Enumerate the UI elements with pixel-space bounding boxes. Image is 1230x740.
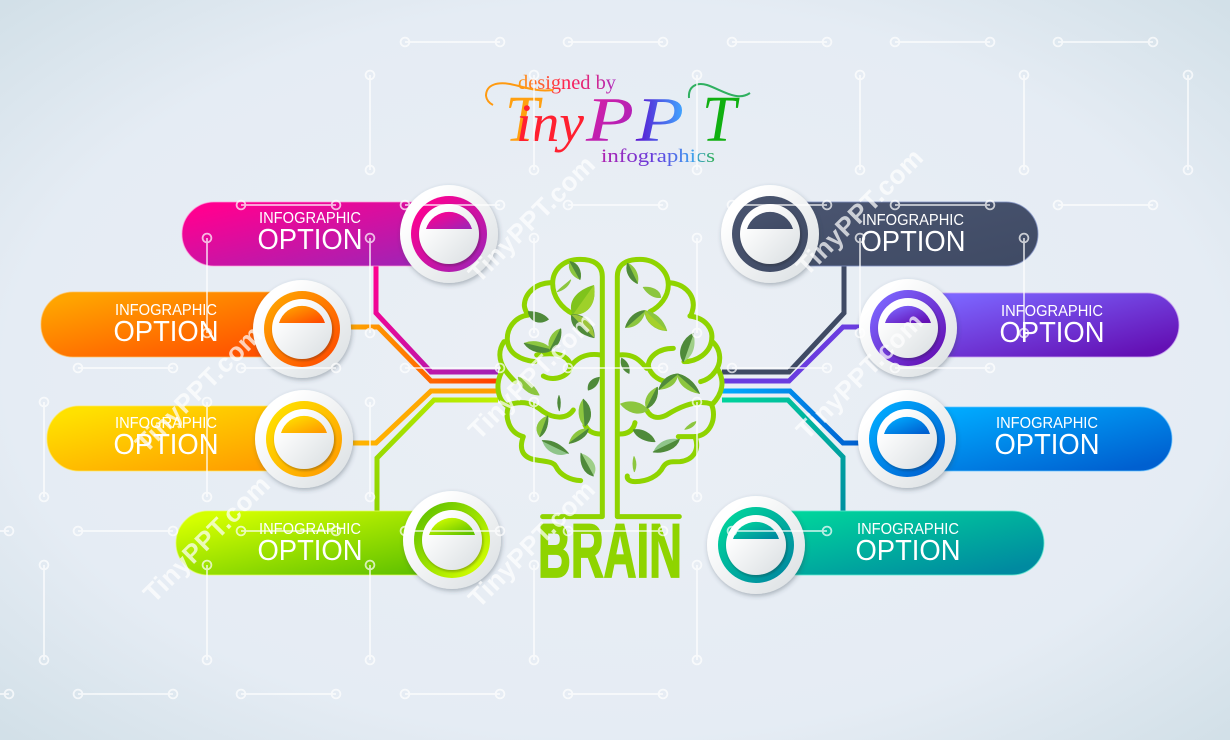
brain title: BRAIN [538,509,682,594]
panel: orange option: INFOGRAPHIC [115,302,217,319]
watermarks: TinyPPT.com [462,149,601,288]
logo: designed by: designed by [518,72,616,94]
panel: pink option [182,185,498,283]
logo: script wordmark: P [635,84,684,155]
panel: dark option: INFOGRAPHIC [862,212,964,229]
watermarks: TinyPPT.com [137,469,276,608]
left hemisphere outline [498,259,602,517]
watermarks: TinyPPT.com [790,142,929,281]
panel: yellow option: OPTION [114,429,218,461]
connector lines: left [348,264,498,513]
panel: lime option: OPTION [258,535,362,567]
panel: blue option: INFOGRAPHIC [996,415,1098,432]
panel: teal option: OPTION [856,535,960,567]
panel: purple option: INFOGRAPHIC [1001,303,1103,320]
panel: purple option: OPTION [1000,317,1104,349]
panel: lime option [176,491,501,589]
logo: script wordmark: iny [516,93,584,153]
panel: orange option: OPTION [114,316,218,348]
right hemisphere outline [617,259,722,517]
panel: dark option: OPTION [860,226,966,258]
panel: pink option: INFOGRAPHIC [259,210,361,227]
panel: yellow option: INFOGRAPHIC [115,415,217,432]
watermarks: TinyPPT.com [790,306,929,445]
panel: lime option: INFOGRAPHIC [259,521,361,538]
watermarks: TinyPPT.com [129,319,268,458]
panel: blue option [858,390,1172,488]
panel: teal option: INFOGRAPHIC [857,521,959,538]
leaves [518,262,699,476]
watermarks: TinyPPT.com [462,306,601,445]
logo: script wordmark: P [585,84,634,155]
logo: script wordmark [486,83,750,156]
panel: blue option: OPTION [994,429,1100,461]
logo [486,72,750,167]
connector lines: right [722,264,862,513]
watermarks [129,142,929,613]
logo: infographics: infographics [601,146,715,167]
brain illustration [498,259,722,517]
logo: script wordmark: T [505,83,543,156]
panel: orange option [41,280,351,378]
logo: script wordmark: T [702,83,740,156]
watermarks: TinyPPT.com [462,474,601,613]
panel: teal option [707,496,1044,594]
panel: purple option [859,279,1179,377]
panel: dark option [721,185,1038,283]
panel: pink option: OPTION [258,224,362,256]
panel: yellow option [47,390,353,488]
